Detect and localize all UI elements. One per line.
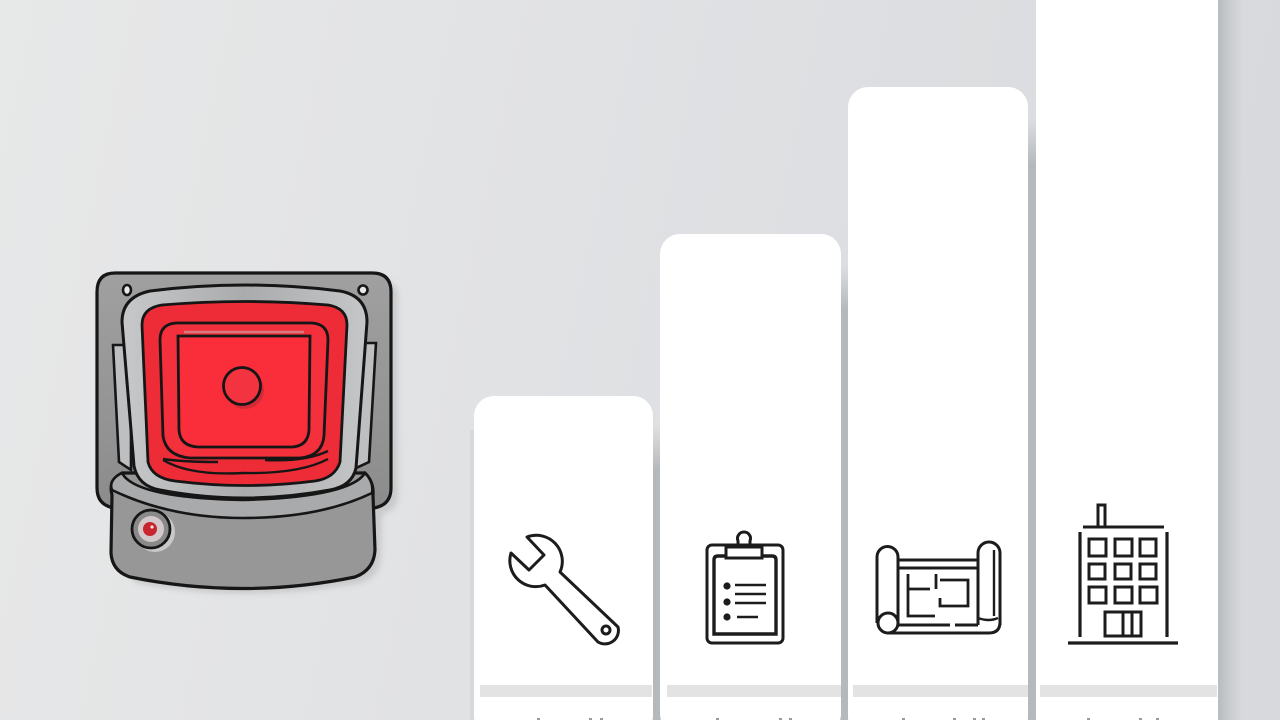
icon: blueprint [877,542,1000,633]
clipped caption tops at bottom edge [537,718,1159,720]
icon: wrench [510,535,618,644]
alarm device illustration [97,273,398,594]
base housing [111,473,375,588]
bar 1 [474,396,653,720]
bar chart [470,0,1242,720]
red screen centre panel [178,336,310,447]
red screen inner ring [160,323,328,458]
bar 3 [848,87,1028,720]
bar 2 [660,234,841,720]
screw holes [123,285,368,295]
mounting plate [97,273,391,508]
centre button [224,368,264,409]
lower screen curves [163,451,328,473]
bar 4 [1036,0,1218,720]
red screen outer [142,302,347,486]
icon: building [1068,505,1178,643]
side tabs [113,343,376,470]
silver bezel [122,285,367,498]
icon: clipboard [707,532,783,643]
screen highlight [184,331,304,333]
device drop shadow [116,279,398,594]
base collar [111,473,372,518]
indicator light [132,510,175,552]
bar shadows [470,0,1242,720]
